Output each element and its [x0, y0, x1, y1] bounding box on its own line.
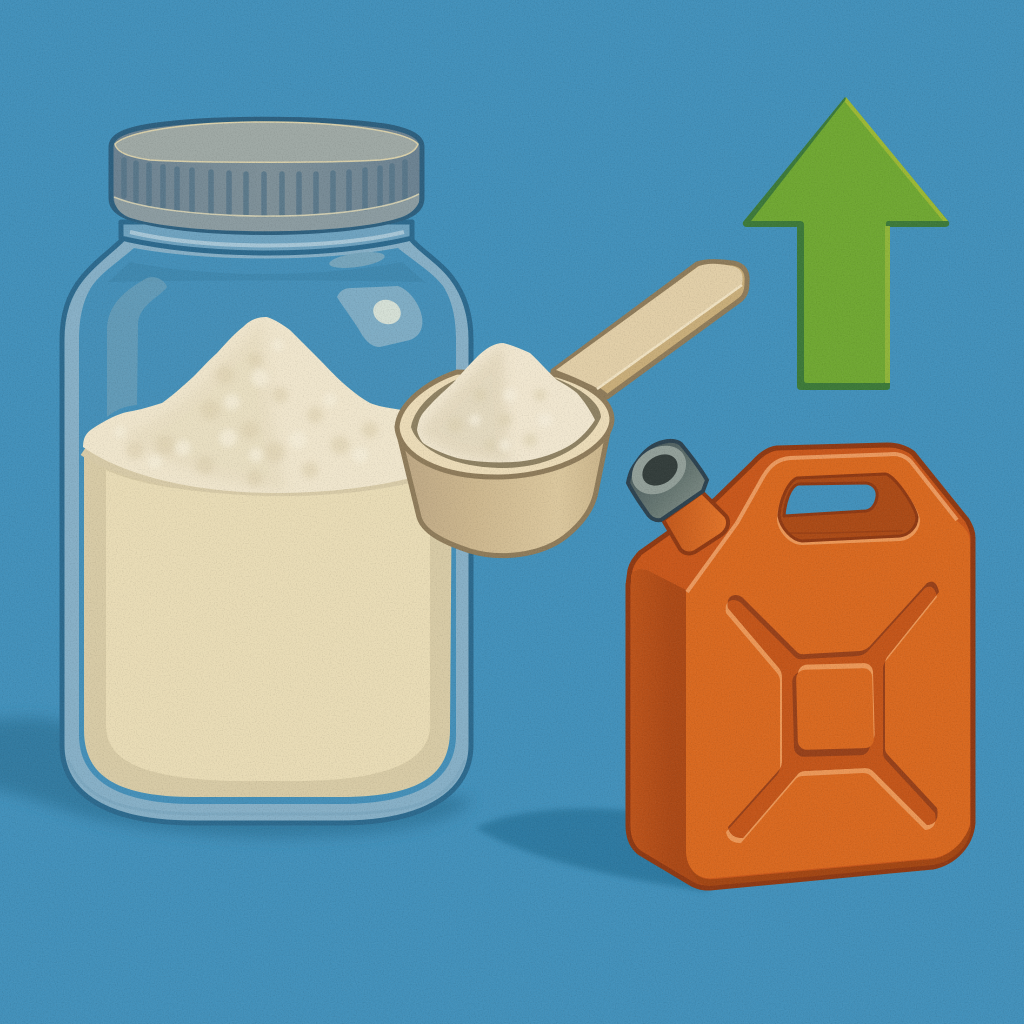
- jar: [62, 119, 471, 823]
- can side panel: [631, 569, 706, 885]
- can front panel: [686, 454, 970, 878]
- scoop: [397, 262, 747, 556]
- lid top: [115, 122, 418, 162]
- can embossed X: [726, 582, 939, 843]
- jar glass outer wall: [62, 222, 471, 823]
- jar powder mound: [83, 317, 407, 493]
- can front highlight line: [687, 454, 957, 592]
- jar upper glass tint: [108, 262, 425, 282]
- green up arrow: [743, 97, 949, 390]
- scoop rim: [397, 372, 612, 477]
- jar highlight right: [337, 286, 422, 347]
- can bottom edge shadow: [690, 823, 971, 886]
- jar lid: [111, 119, 422, 232]
- arrow face: [751, 99, 948, 383]
- jar neck ring: [121, 222, 412, 253]
- jar shadow: [0, 718, 473, 838]
- can spout: [663, 492, 728, 553]
- can center square: [792, 663, 875, 757]
- lid lower band: [114, 195, 419, 231]
- can handle: [777, 474, 920, 545]
- arrow dark edge: [743, 97, 949, 390]
- jar bottom base band: [68, 760, 465, 814]
- can shadow: [476, 809, 710, 892]
- can main body: [628, 445, 973, 888]
- handle window: [784, 483, 877, 516]
- scoop powder: [417, 343, 595, 462]
- orange jerry can: [623, 436, 973, 888]
- lid ribs: [124, 160, 405, 215]
- scoop cup: [399, 418, 611, 556]
- scoop interior: [411, 378, 601, 468]
- jar inner glass: [79, 248, 456, 804]
- jar highlight left: [107, 277, 167, 417]
- can cap: [623, 436, 707, 520]
- scoop handle: [553, 262, 747, 397]
- jar powder body: [84, 450, 452, 797]
